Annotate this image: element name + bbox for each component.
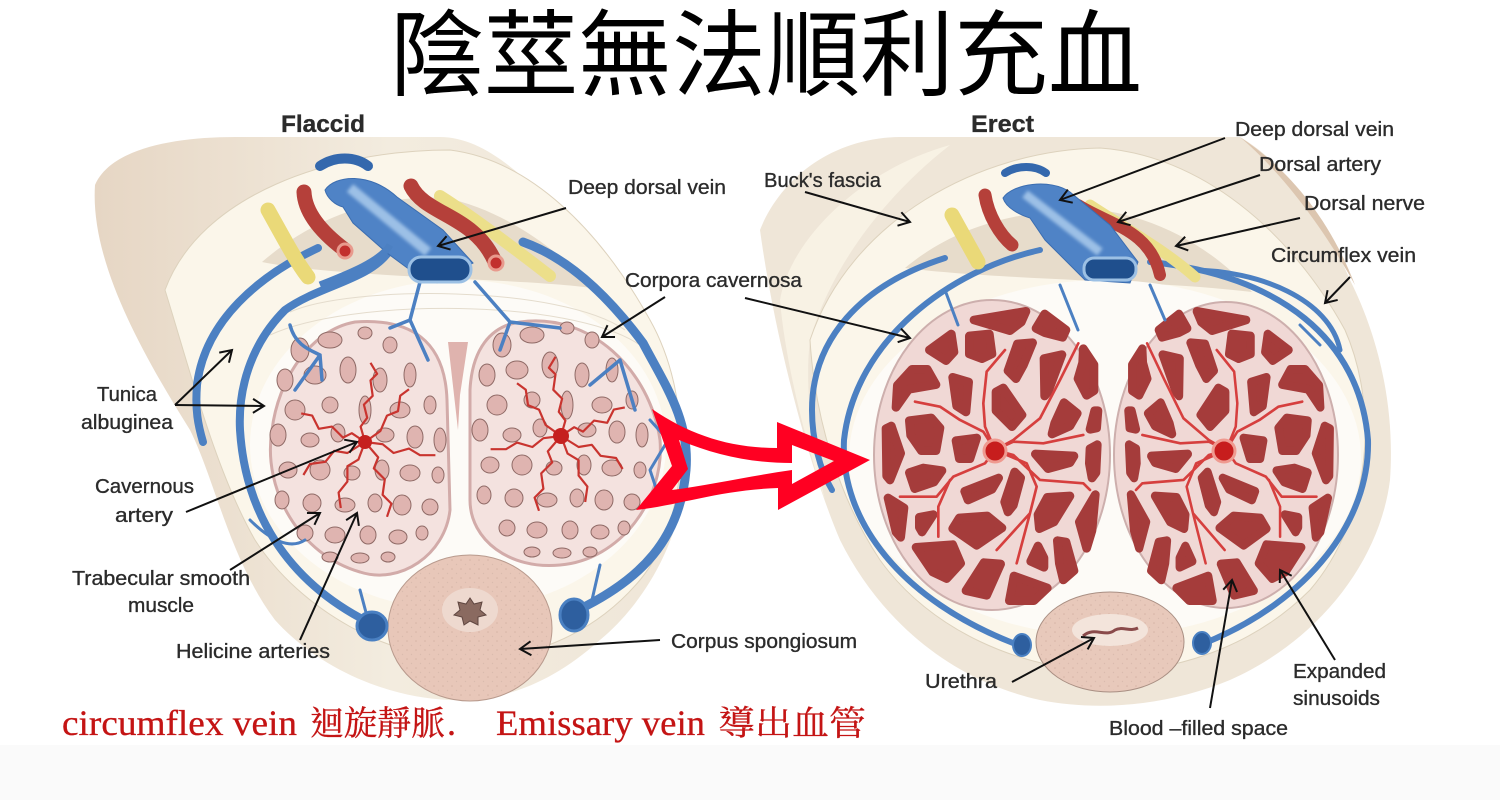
- labels: erect: Expanded: [1293, 660, 1386, 683]
- fascia arcs: [270, 294, 640, 345]
- sinusoids left: [886, 311, 1098, 601]
- dorsal artery ends: [338, 244, 503, 270]
- red caption: 迴旋靜脈: [310, 705, 445, 743]
- helicine arteries right: [491, 357, 625, 511]
- skin outline: [760, 137, 1391, 706]
- corpus cavernosum left: [874, 300, 1110, 610]
- labels: flaccid: Corpora cavernosa: [625, 269, 803, 292]
- red caption: circumflex vein: [62, 703, 297, 743]
- dorsal compartment shade: [905, 210, 1252, 292]
- blue veins: [812, 250, 1368, 645]
- left skin highlight: [780, 145, 950, 500]
- labels: erect: Blood –filled space: [1109, 717, 1288, 740]
- sinusoid spaces right: [472, 322, 648, 558]
- labels: flaccid: Helicine arteries: [176, 640, 330, 663]
- septum: [448, 342, 468, 430]
- cavernous artery dots: [358, 428, 569, 449]
- upper right skin shade: [1240, 137, 1355, 285]
- corpus cavernosum right: [1114, 302, 1338, 608]
- arteries left: [900, 343, 1090, 563]
- labels: flaccid: albuginea: [81, 411, 174, 434]
- red caption: Emissary vein: [496, 703, 705, 743]
- corpus cavernosum left: [270, 322, 450, 575]
- yellow dorsal nerves: [268, 196, 550, 277]
- helicine arteries left: [301, 363, 435, 517]
- labels: flaccid: artery: [115, 504, 174, 527]
- diagram: flaccid cross-section: [95, 137, 686, 701]
- red caption: 導出血管: [718, 705, 866, 743]
- corpus spongiosum: [1036, 592, 1184, 692]
- labels: flaccid: Corpus spongiosum: [671, 630, 857, 653]
- labels: flaccid: [72, 111, 857, 663]
- superficial dorsal vein: [1005, 167, 1046, 173]
- skin outline: [95, 137, 685, 700]
- sinusoid spaces left: [270, 327, 446, 563]
- labels: erect: sinusoids: [1293, 687, 1380, 710]
- white ring around corpora: [849, 280, 1361, 636]
- labels: flaccid: Deep dorsal vein: [568, 176, 726, 199]
- leader arrows: [175, 138, 1350, 708]
- labels: erect: Circumflex vein: [1271, 244, 1416, 267]
- red dorsal arteries: [304, 186, 495, 262]
- deep dorsal vein: [320, 178, 473, 285]
- yellow dorsal nerves: [952, 205, 1195, 277]
- cream fascia band: [810, 148, 1365, 672]
- title: 陰莖無法順利充血: [390, 3, 1142, 108]
- labels: erect: Dorsal artery: [1259, 153, 1382, 176]
- circumflex vein ends: [1013, 632, 1211, 656]
- labels: erect: Erect: [971, 111, 1034, 138]
- superficial dorsal vein: [320, 158, 368, 166]
- labels: flaccid: Trabecular smooth: [72, 567, 250, 590]
- circumflex vein ends: [357, 599, 588, 640]
- cavernous artery dots: [984, 440, 1235, 462]
- labels: erect: [764, 111, 1425, 740]
- labels: flaccid: Flaccid: [281, 111, 365, 138]
- white ring around corpora: [250, 280, 666, 610]
- labels: flaccid: Tunica: [97, 383, 158, 406]
- dorsal compartment shade: [262, 198, 592, 288]
- cream fascia band: [165, 150, 681, 660]
- red caption: [62, 703, 866, 743]
- red arrow: [636, 409, 870, 510]
- labels: erect: Dorsal nerve: [1304, 192, 1425, 215]
- deep dorsal vein: [1003, 184, 1138, 283]
- labels: erect: Urethra: [925, 670, 998, 693]
- red dorsal arteries: [985, 195, 1160, 275]
- corpus spongiosum: [388, 555, 552, 701]
- labels: flaccid: Cavernous: [95, 475, 194, 498]
- sinusoids right: [1128, 311, 1330, 601]
- labels: erect: Deep dorsal vein: [1235, 118, 1394, 141]
- diagram: erect cross-section: [760, 137, 1391, 706]
- labels: flaccid: muscle: [128, 594, 194, 617]
- blue veins: [196, 242, 686, 622]
- arteries right: [1136, 343, 1316, 563]
- red caption: .: [447, 703, 456, 743]
- page background wash: [0, 745, 1500, 800]
- corpus cavernosum right: [470, 321, 660, 566]
- labels: erect: Buck's fascia: [764, 169, 882, 192]
